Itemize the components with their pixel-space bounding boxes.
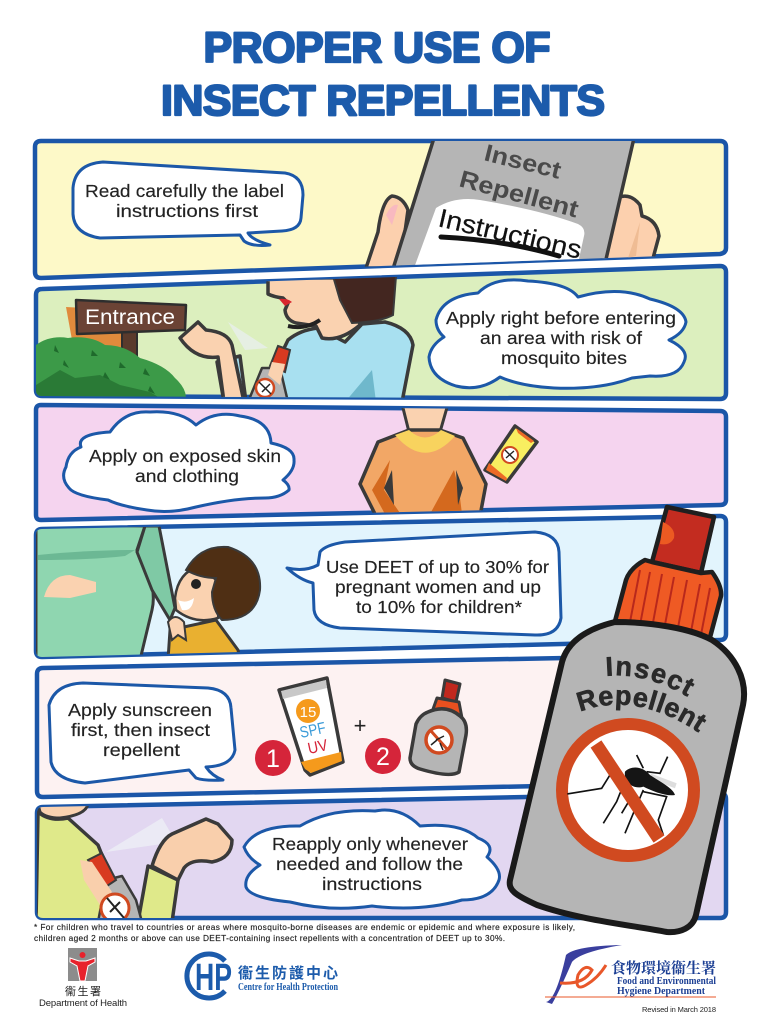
logo: Department of Health <box>39 948 127 1009</box>
footnote: children aged 2 months or above can use DEET-containing insect repellents with a concentration of DEET up to 30%. <box>34 933 505 943</box>
speech bubble: DEET limits: Use DEET of up to 30% for <box>326 557 549 577</box>
cloud bubble: reapply: Reapply only whenever <box>272 834 468 854</box>
panel: exposed skin <box>36 404 726 520</box>
badge: step 2: 2 <box>376 743 390 771</box>
revision date: Revised in March 2018 <box>642 1005 716 1014</box>
illustration: person in orange top <box>360 404 486 516</box>
badge: step 1: 1 <box>266 745 280 773</box>
logo: Centre for Health Protection: 衞生防護中心 <box>238 962 338 983</box>
title <box>161 24 605 125</box>
speech bubble: DEET limits: to 10% for children* <box>356 597 522 617</box>
pregnant woman <box>36 526 175 660</box>
nozzle <box>652 507 714 573</box>
panel: DEET limits <box>36 516 726 660</box>
speech bubble: sunscreen first: first, then insect <box>71 720 210 740</box>
logo: Food and Environmental Hygiene Department <box>545 945 716 1004</box>
icon: sunscreen tube: SPF <box>298 720 327 742</box>
logo: Food and Environmental Hygiene Department: 食物環境衞生署 <box>611 957 716 978</box>
footnote <box>34 922 575 943</box>
panel: read label <box>35 138 726 278</box>
bottle label: Repellent: Repellent <box>576 690 706 732</box>
icon: sunscreen tube <box>279 678 343 775</box>
speech bubble: DEET limits <box>287 532 561 635</box>
panel: sunscreen first <box>37 655 726 797</box>
speech bubble: sunscreen first: repellent <box>103 740 180 760</box>
speech bubble: sunscreen first <box>49 683 235 783</box>
badge: step 2 <box>365 738 401 774</box>
bush <box>36 337 186 398</box>
speech bubble: read label: Read carefully the label <box>85 181 284 201</box>
sign: entrance: Entrance <box>85 306 175 329</box>
plus sign: + <box>354 713 366 738</box>
logo: Food and Environmental Hygiene Department: Hygiene Department <box>617 986 706 997</box>
panel: apply before entering <box>36 266 726 402</box>
icon: sunscreen tube with no-mosquito mark <box>485 426 537 482</box>
badge: step 1 <box>255 740 291 776</box>
child <box>168 547 260 660</box>
icon: no mosquito <box>562 724 694 856</box>
bottle label: Insect: Insect <box>606 656 694 697</box>
illustration: hands holding repellent bottle: Repellent <box>456 166 581 223</box>
icon: sunscreen tube: 15 <box>300 704 316 721</box>
cloud bubble: apply before entering: Apply right before entering <box>446 308 676 328</box>
speech bubble: sunscreen first: Apply sunscreen <box>68 700 212 720</box>
cloud bubble: reapply <box>244 810 500 908</box>
collar <box>614 560 721 645</box>
person spraying arm <box>36 804 232 922</box>
panel: reapply <box>36 793 726 922</box>
cloud bubble: reapply: needed and follow the <box>276 854 463 874</box>
illustration: hands holding repellent bottle <box>366 138 659 272</box>
logo: Centre for Health Protection: HP <box>195 957 232 999</box>
logo: Food and Environmental Hygiene Department: Food and Environmental <box>617 976 716 987</box>
footnote: * For children who travel to countries or areas where mosquito-borne diseases are endemic or epidemic and where exposure is likely, <box>34 922 575 932</box>
illustration: hands holding repellent bottle: Insect <box>482 140 564 185</box>
cloud bubble: reapply: instructions <box>322 874 422 894</box>
title: PROPER USE OF <box>204 24 550 72</box>
logo: Centre for Health Protection <box>187 954 338 999</box>
speech bubble: DEET limits: pregnant women and up <box>335 577 541 597</box>
cloud bubble: exposed skin <box>64 412 294 511</box>
logo: Department of Health: 衞生署 <box>65 984 101 998</box>
large repellent bottle <box>506 504 748 936</box>
speech bubble: read label <box>73 162 303 246</box>
cloud bubble: exposed skin: Apply on exposed skin <box>89 446 281 466</box>
bottle body <box>510 622 744 932</box>
logo: Department of Health: Department of Health <box>39 998 127 1009</box>
cloud bubble: apply before entering: mosquito bites <box>501 348 627 368</box>
logo: Centre for Health Protection: Centre for Health Protection <box>238 982 338 993</box>
speech bubble: read label: instructions first <box>116 201 258 221</box>
woman applying spray <box>180 276 413 402</box>
sign: entrance <box>66 300 186 358</box>
icon: sunscreen tube: UV <box>306 737 330 758</box>
cloud bubble: apply before entering <box>429 280 686 388</box>
title: INSECT REPELLENTS <box>161 77 605 125</box>
cloud bubble: apply before entering: an area with risk of <box>480 328 642 348</box>
illustration: hands holding repellent bottle: Instructions <box>436 203 585 265</box>
cloud bubble: exposed skin: and clothing <box>135 466 239 486</box>
icon: small repellent bottle <box>410 680 466 774</box>
